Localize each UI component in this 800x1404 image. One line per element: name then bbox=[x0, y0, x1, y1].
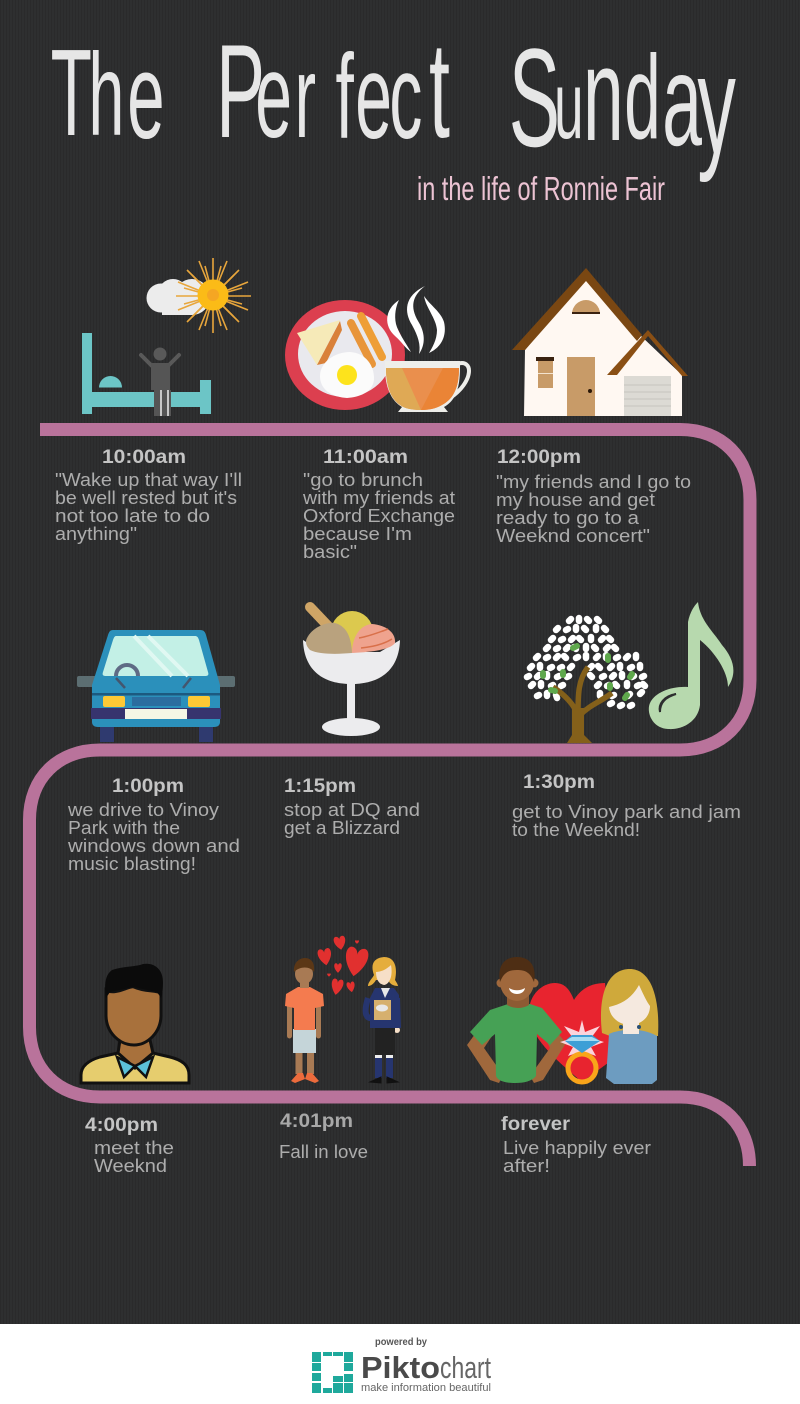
text: 12:00pm: my house and get bbox=[496, 490, 655, 510]
text: forever bbox=[501, 1114, 651, 1176]
title: T bbox=[51, 25, 92, 162]
icon: music note bbox=[649, 602, 733, 729]
title: r bbox=[295, 33, 316, 163]
text: 1:00pm: Park with the bbox=[68, 818, 180, 838]
title: t bbox=[429, 14, 450, 167]
text: 11:00am bbox=[302, 447, 455, 562]
subtitle: in the life of Ronnie Fair bbox=[417, 170, 665, 207]
text: 1:30pm: get to Vinoy park and jam bbox=[512, 802, 741, 822]
text: 1:00pm: music blasting! bbox=[68, 854, 196, 874]
text: 10:00am: be well rested but it's bbox=[55, 488, 237, 508]
text: 11:00am: with my friends at bbox=[302, 488, 455, 508]
text: 1:30pm: 1:30pm bbox=[523, 772, 595, 793]
girl bbox=[366, 957, 400, 1083]
text: 12:00pm bbox=[496, 447, 691, 546]
title: S bbox=[509, 20, 560, 176]
icon: ice cream sundae bbox=[303, 607, 400, 736]
text: 4:00pm: meet the bbox=[94, 1138, 174, 1158]
text: 11:00am: 11:00am bbox=[323, 447, 408, 468]
title: f bbox=[336, 29, 355, 164]
text: 4:01pm: Fall in love bbox=[279, 1142, 368, 1162]
text: 4:00pm: 4:00pm bbox=[85, 1115, 158, 1136]
text: 4:01pm: 4:01pm bbox=[280, 1111, 353, 1132]
timeline path bbox=[30, 430, 750, 1166]
powered by: powered by bbox=[375, 1336, 427, 1348]
text: 12:00pm: ready to go to a bbox=[496, 508, 640, 528]
text: 10:00am bbox=[55, 447, 242, 544]
text: 11:00am: Oxford Exchange bbox=[303, 506, 455, 526]
text: 1:30pm: to the Weeknd! bbox=[512, 820, 640, 840]
icon: car bbox=[77, 630, 235, 742]
icon: Piktochart logo bbox=[312, 1352, 353, 1393]
text: 1:00pm: we drive to Vinoy bbox=[67, 800, 219, 820]
text: 10:00am: not too late to do bbox=[55, 506, 210, 526]
text: 11:00am: basic" bbox=[303, 542, 357, 562]
icon: house bbox=[512, 268, 688, 416]
text: 1:00pm bbox=[67, 776, 240, 874]
text: 1:30pm bbox=[512, 772, 741, 840]
text: forever: Live happily ever bbox=[503, 1138, 651, 1158]
text: 11:00am: because I'm bbox=[303, 524, 412, 544]
logo tagline: make information beautiful bbox=[361, 1382, 491, 1394]
boy bbox=[285, 958, 324, 1083]
man bbox=[467, 957, 566, 1083]
icon: couple with heart and ring bbox=[467, 957, 658, 1084]
text: 10:00am: "Wake up that way I'll bbox=[55, 470, 242, 490]
text: 4:00pm bbox=[85, 1115, 174, 1176]
title: e bbox=[127, 28, 165, 164]
text: forever: forever bbox=[501, 1114, 571, 1135]
icon: sun and cloud bbox=[146, 258, 251, 333]
hearts bbox=[317, 935, 369, 996]
title: e bbox=[255, 28, 292, 163]
text: 1:15pm: 1:15pm bbox=[284, 776, 356, 797]
icon: bed and stretching person bbox=[82, 333, 211, 416]
text: forever: after! bbox=[503, 1156, 550, 1176]
text: 1:00pm: windows down and bbox=[67, 836, 240, 856]
title: y bbox=[697, 27, 736, 183]
text: 11:00am: "go to brunch bbox=[303, 470, 423, 490]
icon: tree bbox=[527, 618, 645, 743]
icon: boy and girl with hearts bbox=[285, 935, 400, 1083]
title: c bbox=[389, 29, 422, 164]
text: 10:00am: anything" bbox=[55, 524, 137, 544]
text: 1:15pm: stop at DQ and bbox=[284, 800, 420, 820]
text: 12:00pm: Weeknd concert" bbox=[496, 526, 650, 546]
logo wordmark: Pikto bbox=[361, 1350, 440, 1385]
text: 1:00pm: 1:00pm bbox=[112, 776, 184, 797]
icon: the Weeknd portrait bbox=[81, 964, 189, 1083]
title: n bbox=[583, 20, 624, 169]
text: 1:15pm bbox=[284, 776, 420, 838]
text: 4:00pm: Weeknd bbox=[94, 1156, 167, 1176]
woman bbox=[601, 969, 658, 1084]
title: u bbox=[554, 52, 583, 159]
text: 12:00pm: "my friends and I go to bbox=[496, 472, 691, 492]
title: a bbox=[662, 29, 702, 174]
text: 1:15pm: get a Blizzard bbox=[284, 818, 400, 838]
title: h bbox=[89, 31, 124, 161]
text: 12:00pm: 12:00pm bbox=[497, 447, 581, 468]
icon: breakfast plate bbox=[285, 300, 405, 410]
title: e bbox=[355, 29, 392, 164]
diamond ring bbox=[560, 1020, 604, 1082]
title bbox=[51, 14, 736, 183]
title: d bbox=[624, 31, 661, 164]
icon: cup of tea with steam bbox=[385, 286, 469, 412]
logo wordmark: chart bbox=[440, 1350, 491, 1385]
text: 10:00am: 10:00am bbox=[102, 447, 186, 468]
title: P bbox=[216, 17, 265, 166]
footer bbox=[0, 1324, 800, 1404]
text: 4:01pm bbox=[279, 1111, 368, 1162]
